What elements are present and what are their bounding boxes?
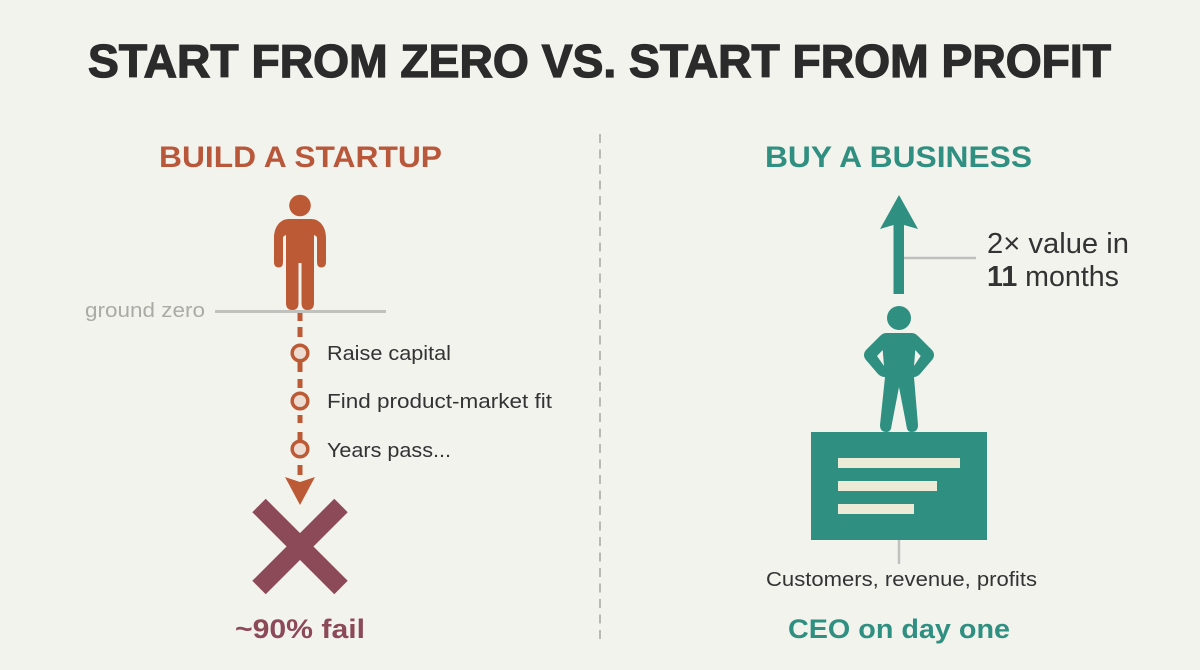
callout: 2x value in 11 months [904, 228, 1129, 293]
label: ceo on day one: CEO on day one [788, 614, 1010, 644]
panel: buy a business [765, 141, 1129, 644]
step: find product-market fit: Find product-market fit [327, 391, 552, 413]
panel: build a startup [85, 141, 552, 644]
arrow head down [285, 477, 315, 505]
ground zero line: ground zero [85, 300, 205, 322]
label: 90% fail: ~90% fail [235, 614, 365, 644]
title: START FROM ZERO VS. START FROM PROFIT [88, 35, 1111, 87]
callout: 2x value in 11 months: 2× value in [987, 228, 1129, 260]
icon: person hands on hips [864, 306, 934, 432]
callout: 2x value in 11 months: 11 months [987, 261, 1119, 293]
icon: failure cross [259, 506, 341, 588]
icon: standing person [274, 195, 326, 310]
step: raise capital: Raise capital [327, 343, 451, 365]
heading: buy a business: BUY A BUSINESS [765, 141, 1032, 174]
arrow up [880, 195, 918, 294]
caption: customers, revenue, profits: Customers, revenue, profits [766, 569, 1037, 591]
dashed path downward [298, 313, 302, 475]
heading: build a startup: BUILD A STARTUP [159, 141, 442, 174]
icon: business block [811, 432, 987, 540]
step: years pass: Years pass... [327, 440, 451, 462]
